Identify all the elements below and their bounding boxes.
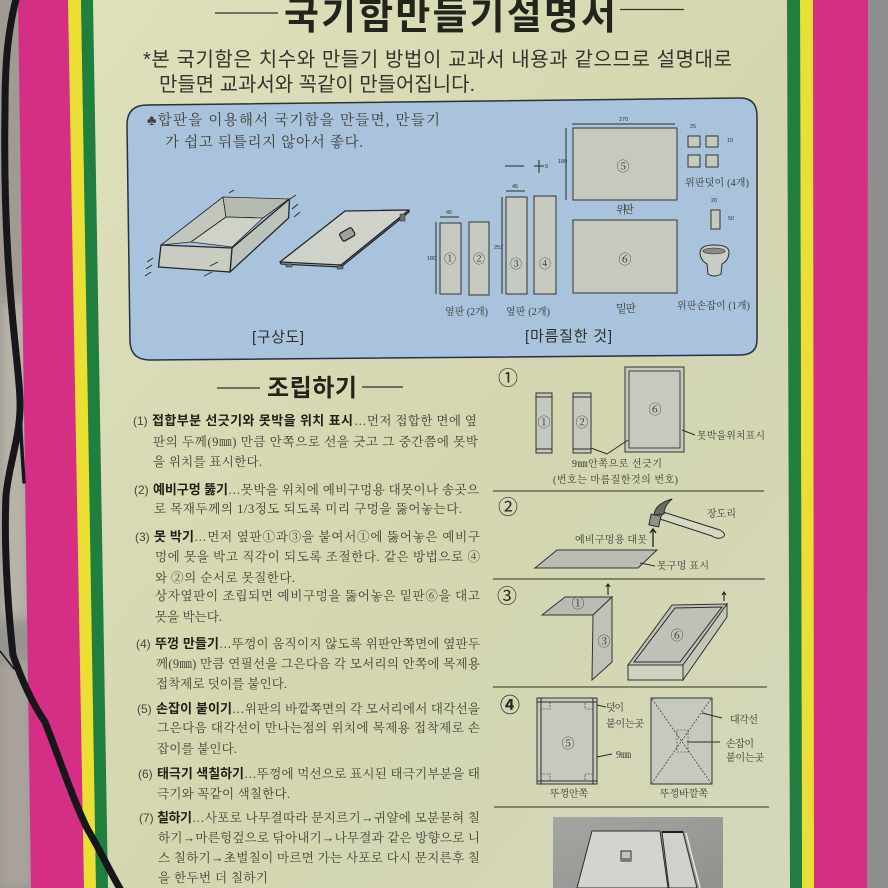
captions <box>252 328 612 346</box>
diagram 1: marking lines: 9㎜안쪽으로 선긋기 <box>572 457 662 470</box>
step 2 text: …못박을 위치에 예비구멍용 대못이나 송곳으 <box>228 482 479 497</box>
dimension labels: 180 <box>558 159 567 165</box>
step 1 text: …먼저 접합한 면에 옆 <box>354 413 477 428</box>
lid drawing <box>280 210 409 269</box>
black cable <box>0 0 122 888</box>
step 4 text: …뚜껑이 움직이지 않도록 위판안쪽면에 옆판두 <box>219 636 480 651</box>
dimension labels: 45 <box>512 184 518 190</box>
step 6 text: 태극기 색칠하기 <box>157 766 244 781</box>
diagram 4: lid inside and outside: 붙이는곳 <box>606 717 644 730</box>
part labels: 위판손잡이 (1개) <box>677 299 750 312</box>
intro note: 만들면 교과서와 꼭같이 만들어집니다. <box>159 73 475 96</box>
dimension labels: 9 <box>545 164 548 170</box>
part labels: 옆판 (2개) <box>445 305 488 318</box>
step 7 text: (7) <box>139 811 154 825</box>
step 7 text: 하기→마른헝겊으로 닦아내기→나무결과 같은 방향으로 니 <box>158 830 480 845</box>
step 1 text: 접합부분 선긋기와 못박을 위치 표시 <box>152 413 353 428</box>
diagram 2: pilot holes and hammer: 장도리 <box>707 507 736 520</box>
step 3 text: 못 박기 <box>154 529 194 544</box>
diagram 4: lid inside and outside: 덧이 <box>606 701 624 714</box>
step 5 text: 손잡이 붙이기 <box>156 701 232 716</box>
dimension labels: 45 <box>446 210 452 216</box>
diagram 1: marking lines <box>498 367 765 486</box>
green stripe left <box>81 0 108 888</box>
diagram 4: lid inside and outside: 붙이는곳 <box>726 751 764 764</box>
dimension labels: 20 <box>711 198 717 204</box>
diagram 3: nailing corner and base: ⑥ <box>670 628 684 643</box>
step 4 text: (4) <box>136 637 151 651</box>
plywood note <box>147 111 440 151</box>
part labels: 위판덧이 (4개) <box>685 176 749 189</box>
diagram 4: lid inside and outside: 9㎜ <box>616 750 631 761</box>
diagram 1: marking lines: 못박을위치표시 <box>697 429 765 442</box>
captions: [구상도] <box>252 329 304 346</box>
cut parts: side boards: ② <box>473 252 485 266</box>
step 7 text: 칠하기 <box>157 810 192 825</box>
step 7 text: 을 한두번 더 칠하기 <box>158 870 268 885</box>
step 4 text <box>136 636 480 691</box>
diagram 2: pilot holes and hammer: 예비구멍용 대못 <box>575 533 647 546</box>
intro note <box>143 48 732 96</box>
step 4 text: 께(9㎜) 만큼 연필선을 그은다음 각 모서리의 안쪽에 목제용 <box>156 656 480 671</box>
diagram 4: lid inside and outside: ⑤ <box>561 736 575 751</box>
heading: assembly: 조립하기 <box>267 375 357 402</box>
diagram 2: pilot holes and hammer <box>493 491 764 572</box>
cut parts: top and bottom boards: ⑥ <box>618 252 632 267</box>
cleats and knob <box>688 136 729 276</box>
cut parts: top and bottom boards <box>566 124 677 293</box>
diagram 4: lid inside and outside: 손잡이 <box>726 737 754 750</box>
green stripe right <box>787 0 802 888</box>
diagram 1: marking lines: (번호는 마름질한것의 번호) <box>553 473 678 486</box>
part labels: 밑판 <box>616 301 636 315</box>
step 3 text: 멍에 못을 박고 직각이 되도록 조절한다. 같은 방법으로 ④ <box>155 549 480 564</box>
hammer icon <box>649 499 724 538</box>
diagram 3: nailing corner and base: ③ <box>597 634 611 649</box>
step 5 text <box>137 701 480 756</box>
diagram 4: lid inside and outside: 뚜껑바깥쪽 <box>660 787 708 800</box>
step 5 text: 잡이를 붙인다. <box>157 741 237 756</box>
dimension labels: 270 <box>619 117 628 123</box>
step 2 text: (2) <box>134 483 149 497</box>
step 2 text <box>134 482 479 516</box>
step 4 text: 접착제로 덧이를 붙인다. <box>156 676 287 691</box>
cut parts: top and bottom boards: ⑤ <box>616 159 630 174</box>
step 2 text: 예비구멍 뚫기 <box>153 482 228 497</box>
step 6 text <box>138 766 480 801</box>
step 3 text <box>135 529 480 624</box>
diagram 3: nailing corner and base <box>493 579 765 680</box>
step 3 text: 상자옆판이 조립되면 예비구멍을 뚫어놓은 밑판⑥을 대고 <box>155 588 480 603</box>
diagram 4: lid inside and outside: ④ <box>500 694 520 717</box>
step 1 text: 판의 두께(9㎜) 만큼 안쪽으로 선을 긋고 그 중간쯤에 못박 <box>153 434 478 449</box>
diagram 4: lid inside and outside <box>493 687 767 800</box>
dimension labels: 10 <box>727 138 733 144</box>
diagram 4: lid inside and outside: 뚜껑안쪽 <box>550 787 588 800</box>
step 3 text: 못을 박는다. <box>155 609 222 624</box>
step 6 text: 극기와 꼭같이 색칠한다. <box>157 786 290 801</box>
step 4 text: 뚜껑 만들기 <box>155 636 219 651</box>
yellow stripe right <box>800 0 814 888</box>
diagram 3: nailing corner and base: ③ <box>497 585 517 608</box>
captions: [마름질한 것] <box>525 328 612 345</box>
step 2 text: 로 목재두께의 1/3정도 되도록 미리 구멍을 뚫어놓는다. <box>154 501 462 516</box>
cut parts: side boards <box>436 160 556 295</box>
part labels <box>445 176 750 318</box>
diagram 2: pilot holes and hammer: 못구멍 표시 <box>657 559 709 572</box>
open box drawing <box>145 190 300 276</box>
step 3 text: …먼저 옆판①과③을 붙여서①에 뚫어놓은 예비구 <box>194 529 480 544</box>
step 7 text: …사포로 나무결따라 문지르기→귀얄에 모분묻혀 칠 <box>192 810 480 825</box>
dimension labels <box>427 117 734 262</box>
cut parts: side boards: ④ <box>539 257 551 271</box>
cut parts: side boards: ① <box>444 252 456 266</box>
cut parts: side boards: ③ <box>510 257 522 271</box>
yellow stripe left <box>68 0 97 888</box>
step 5 text: 그은다음 대각선이 만나는점의 위치에 목제용 접착제로 손 <box>157 720 480 735</box>
diagram 1: marking lines: ② <box>575 415 589 430</box>
dimension labels: 25 <box>690 124 696 130</box>
diagram 2: pilot holes and hammer: ② <box>498 496 518 519</box>
diagram 1: marking lines: ① <box>498 367 518 390</box>
step 3 text: (3) <box>135 530 150 544</box>
step 3 text: 와 ②의 순서로 못질한다. <box>155 570 295 585</box>
plywood note: 가 쉽고 뒤틀리지 않아서 좋다. <box>165 133 363 151</box>
diagram 3: nailing corner and base: ① <box>571 596 585 611</box>
part labels: 옆판 (2개) <box>506 305 550 318</box>
step 5 text: …위판의 바깥쪽면의 각 모서리에서 대각선을 <box>232 701 480 716</box>
dimension labels: 180 <box>427 256 436 262</box>
step 1 text <box>133 413 478 469</box>
part labels: 위판 <box>616 202 634 216</box>
step 1 text: 을 위치를 표시한다. <box>153 454 262 469</box>
step 5 text: (5) <box>137 702 152 716</box>
diagram 1: marking lines: ① <box>537 415 551 430</box>
step 6 text: (6) <box>138 767 153 781</box>
panel: blue materials <box>127 98 757 360</box>
diagram 4: lid inside and outside: 대각선 <box>730 713 758 726</box>
intro note: *본 국기함은 치수와 만들기 방법이 교과서 내용과 같으므로 설명대로 <box>143 48 732 71</box>
cream paper panel <box>93 0 790 888</box>
diagram 5: finished box photo <box>494 807 769 888</box>
step 6 text: …뚜껑에 먹선으로 표시된 태극기부분을 태 <box>244 766 480 781</box>
step 1 text: (1) <box>133 414 148 428</box>
diagram 1: marking lines: ⑥ <box>648 402 662 417</box>
step 7 text: 스 칠하기→초벌칠이 마르면 가는 사포로 다시 문지른후 칠 <box>158 850 480 865</box>
step 7 text <box>139 810 480 885</box>
plywood note: ♣합판을 이용해서 국기함을 만들면, 만들기 <box>147 111 440 129</box>
dimension labels: 252 <box>494 245 503 251</box>
dimension labels: 50 <box>728 216 734 222</box>
